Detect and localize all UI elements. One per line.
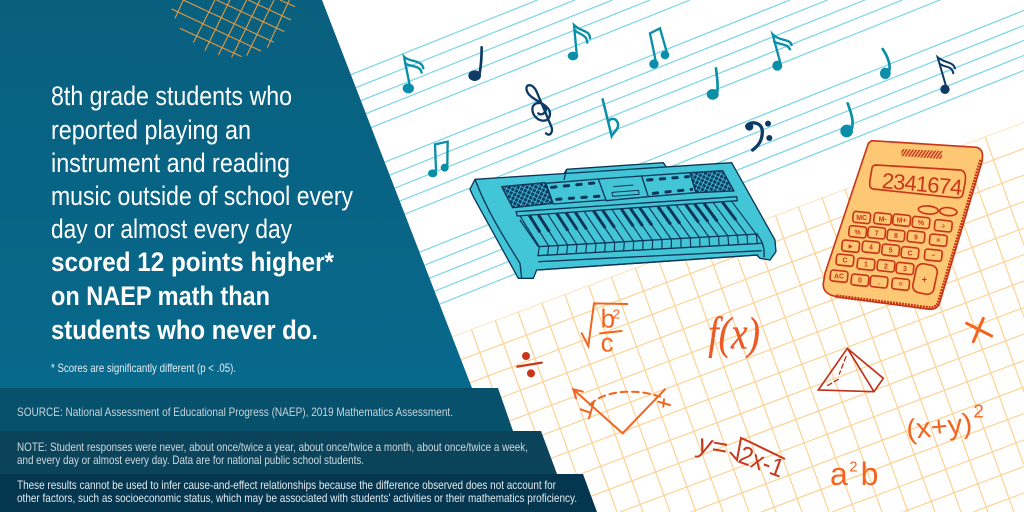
main statement text: reported playing an [51,115,251,145]
icon: calculator: 2341674 [881,168,963,200]
formula: root of b squared over c: 2 [613,306,620,321]
icon: calculator: − [931,253,935,260]
icon: flat sign [603,99,618,136]
button row 5 [830,262,939,296]
button row 3 [841,240,942,262]
icon: beamed notes 1 [649,28,669,69]
icon: quarter note 2 [880,49,891,79]
icon: eighth note 2 [568,25,590,60]
formula: y equals root of 2x minus 1: 2x-1 [735,439,788,483]
icon: calculator: 9 [914,234,918,241]
icon: calculator: . [878,279,880,286]
icon: quarter note navy [468,47,482,81]
left teal panel [0,0,472,388]
main statement text: music outside of school every [51,181,353,211]
significance footnote: * Scores are significantly different (p < .05). [51,361,236,375]
formula: a squared b: 2 [849,460,857,476]
icon: calculator: 8 [894,233,898,240]
math formulas, right group [818,318,992,492]
icon: calculator: + [922,275,928,285]
icon: keyboard [470,163,776,278]
caveat band [0,474,597,512]
main statement text: on NAEP math than [51,281,270,311]
icon: treble clef [526,85,552,135]
icon: calculator: × [936,238,940,245]
icon: eighth note navy [938,57,955,94]
formula: root of b squared over c: c [601,328,614,358]
diagram: angle with arc [573,389,670,433]
icon: calculator: ► [847,244,854,251]
icon: beamed notes 2 [428,142,449,177]
icon: calculator: ÷ [941,223,945,230]
main statement text [51,81,353,345]
icon: calculator: % [855,229,862,236]
formula: y equals root of 2x minus 1: y= [694,428,730,463]
icon: calculator: 1 [864,262,868,269]
icon: quarter note 3 [840,103,853,137]
math formulas, left group [517,303,760,433]
icon: calculator: MC [856,215,867,222]
icon: division sign [517,352,542,377]
main statement text: day or almost every day [51,214,292,244]
icon: eighth note 1 [403,57,423,93]
icon: calculator: M+ [897,218,907,225]
main statement text: instrument and reading [51,148,290,178]
formula: root of b squared over c [582,303,627,358]
formula: x plus y squared [905,400,984,445]
orange crosshatch decoration [172,0,295,57]
caveat band: other factors, such as socioeconomic status, which may be associated with students' activities or their mathematics proficiency. [17,491,577,505]
note band: and every day or almost every day. Data are for national public school students. [17,453,364,467]
graph paper grid [452,122,1024,512]
icon: calculator: 7 [875,230,879,237]
icon: calculator: C [907,250,913,257]
formula: x plus y squared: (x+y) [905,408,974,445]
music staff lines [330,0,1024,328]
icon: calculator: % [918,220,925,227]
diagram: pyramid [818,348,883,392]
source band: SOURCE: National Assessment of Educational Progress (NAEP), 2019 Mathematics Assessment. [17,405,453,419]
formula: y equals root of 2x minus 1 [694,428,788,483]
main statement text: scored 12 points higher* [51,247,334,277]
icon: calculator: M- [879,216,887,223]
formula: x plus y squared: 2 [973,400,984,421]
formula: a squared b: a [830,456,848,492]
icon: bass clef [745,121,772,150]
icon: calculator [823,141,983,309]
icon: calculator: C [842,258,848,265]
caveat band: These results cannot be used to infer cause-and-effect relationships because the difference observed does not account for [17,478,556,492]
icon: calculator: AC [834,274,844,281]
main statement text: 8th grade students who [51,81,292,111]
icon: calculator: 2 [884,263,888,270]
music notes, left group [403,25,669,177]
icon: eighth note 3 [772,34,792,71]
formula: root of b squared over c: b [601,303,615,333]
main statement text: students who never do. [51,315,318,345]
note band: NOTE: Student responses were never, about once/twice a year, about once/twice a month, about once/twice a week, [17,440,528,454]
icon: calculator: 3 [903,266,907,273]
formula: a squared b [830,456,878,492]
icon: quarter note 1 [707,68,719,100]
formula: f of x: f(x) [708,308,760,358]
music notes, right group [707,34,955,150]
icon: calculator: = [899,282,903,289]
icon: calculator: 5 [889,248,893,255]
icon: multiplication sign [967,318,992,342]
icon: calculator: 4 [869,245,873,252]
button row 2 [848,225,947,247]
note band [0,431,557,474]
button row 1 [852,211,952,232]
button row 4 [836,254,914,275]
formula: a squared b: b [861,456,878,492]
icon: calculator: 0 [858,278,862,285]
source band [0,388,513,431]
